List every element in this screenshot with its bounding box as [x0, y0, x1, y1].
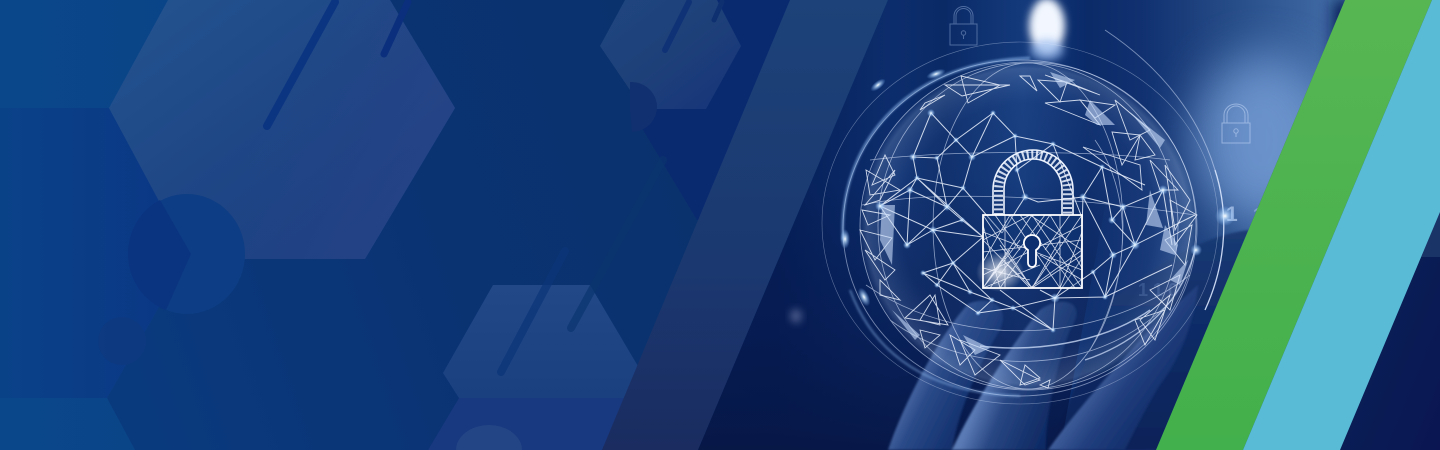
- diagonal pills: [267, 2, 722, 372]
- left geometric background: [0, 0, 800, 450]
- globe highlight wedges: [880, 72, 1188, 355]
- padlock keyhole: [1024, 235, 1040, 267]
- globe continent fragments: [860, 75, 1197, 388]
- hexagon: bottom light: [443, 285, 642, 398]
- hexagon: top right light: [600, 0, 741, 109]
- globe meridians and parallels: [860, 62, 1196, 390]
- circle: top right small: [630, 82, 657, 109]
- circle: bottom: [456, 425, 522, 450]
- fingers: [888, 285, 1198, 450]
- circle: small translucent: [98, 317, 146, 365]
- navy corner highlight: [1421, 212, 1440, 257]
- green stripe: [1156, 0, 1432, 450]
- small padlock: top: [950, 6, 977, 45]
- hexagon: lower left: [74, 108, 159, 398]
- dark surface: [1064, 229, 1248, 450]
- photo background: [698, 0, 1360, 450]
- binary digits: [1138, 203, 1263, 300]
- hexagon: right dark blue: [644, 109, 719, 220]
- small padlock: right: [1222, 104, 1250, 143]
- padlock body: [976, 215, 1082, 292]
- light: top bright spot: [1029, 0, 1065, 61]
- globe network lines: [880, 113, 1195, 330]
- padlock shackle: [993, 150, 1073, 215]
- dark stripe near green: [1323, 0, 1345, 51]
- binary digits: 1 1 0: [1138, 280, 1178, 300]
- hexagon: large light: [109, 0, 455, 259]
- hexagon: central dark field: [108, 0, 698, 450]
- globe sparks: [840, 67, 1235, 333]
- shade lower left: [698, 240, 1096, 450]
- circle: large translucent: [159, 194, 245, 314]
- binary digits: 1: [1226, 203, 1238, 226]
- globe: [840, 62, 1235, 390]
- central padlock: [976, 150, 1082, 292]
- binary digits: 1: [1253, 205, 1263, 225]
- sphere orbit rings: [822, 30, 1224, 404]
- navy corner: [1340, 212, 1440, 450]
- light: blurred dot: [790, 309, 802, 323]
- hexagon: bottom indigo: [428, 398, 625, 450]
- cyan stripe: [1243, 0, 1440, 450]
- light: upper right wash: [1194, 55, 1330, 225]
- diagonal band: [602, 0, 888, 450]
